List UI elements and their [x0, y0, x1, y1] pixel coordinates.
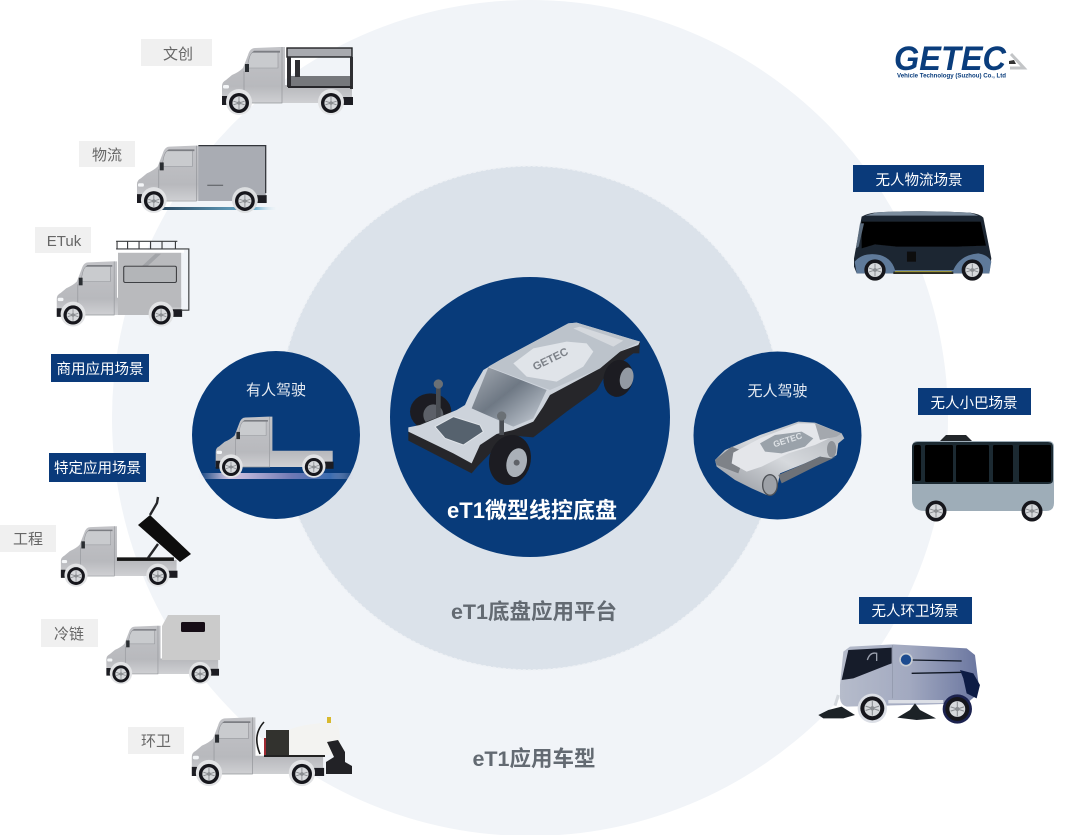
tag: 特定应用场景 [49, 453, 146, 482]
chassis title: eT1微型线控底盘 [447, 498, 617, 523]
tag: 无人小巴场景 [918, 388, 1031, 415]
tag: 环卫: 环卫 [141, 733, 171, 750]
vehicle: 文创 food truck [222, 47, 353, 115]
tag: 无人物流场景: 无人物流场景 [876, 172, 962, 189]
circle: 有人驾驶 [192, 351, 360, 519]
tag: 文创: 文创 [163, 46, 193, 63]
tag: 商用应用场景: 商用应用场景 [56, 360, 144, 378]
chassis [408, 323, 640, 490]
chassis logo plate: GETEC [531, 346, 570, 373]
tag: 商用应用场景 [51, 354, 149, 382]
vehicle: ETuk [57, 241, 189, 326]
tag: 工程 [0, 525, 56, 552]
tag: 无人环卫场景: 无人环卫场景 [872, 603, 958, 620]
vehicles label: eT1应用车型 [472, 746, 596, 771]
tag: 特定应用场景: 特定应用场景 [54, 459, 141, 477]
logo: GETEC: GETEC [894, 40, 1006, 78]
vehicle: autonomous sweeper [818, 644, 980, 724]
tag: 物流: 物流 [92, 147, 122, 164]
middle circle: eT1 chassis platform [278, 166, 782, 670]
vehicle: 冷链 refrigerated truck [106, 615, 220, 684]
tag: ETuk [35, 227, 91, 253]
vehicle: autonomous logistics van [854, 211, 991, 281]
tag: 文创 [141, 39, 212, 66]
circle: eT1微型线控底盘 [390, 277, 670, 557]
tag: 无人物流场景 [853, 165, 984, 192]
tag: 工程: 工程 [13, 531, 43, 548]
tag: ETuk: ETuk [47, 233, 82, 250]
tag: 冷链 [41, 619, 98, 647]
outer circle: eT1 application vehicles [112, 0, 948, 835]
label: 有人驾驶: 有人驾驶 [246, 382, 306, 399]
autonomous skateboard chassis [715, 422, 844, 495]
tag: 环卫 [128, 727, 184, 754]
tag: 无人环卫场景 [859, 597, 972, 624]
tag: 物流 [79, 141, 135, 167]
vehicle: 工程 dump truck [61, 497, 191, 587]
vehicle: 环卫 sanitation truck [192, 717, 352, 786]
label: 无人驾驶: 无人驾驶 [747, 383, 808, 400]
tag: 无人小巴场景: 无人小巴场景 [930, 395, 1018, 412]
tag: 冷链: 冷链 [54, 626, 84, 643]
light streak [198, 473, 354, 479]
vehicle: 物流 box van [137, 146, 280, 213]
vehicle: pickup truck [216, 417, 334, 478]
logo: GETEC: Vehicle Technology (Suzhou) Co., Ltd [897, 74, 1006, 80]
circle: 无人驾驶 [694, 352, 862, 520]
platform label: eT1底盘应用平台 [451, 599, 617, 624]
chassis logo plate [513, 342, 593, 382]
autonomous skateboard chassis: GETEC [772, 430, 804, 449]
vehicle: autonomous minibus [912, 435, 1054, 522]
